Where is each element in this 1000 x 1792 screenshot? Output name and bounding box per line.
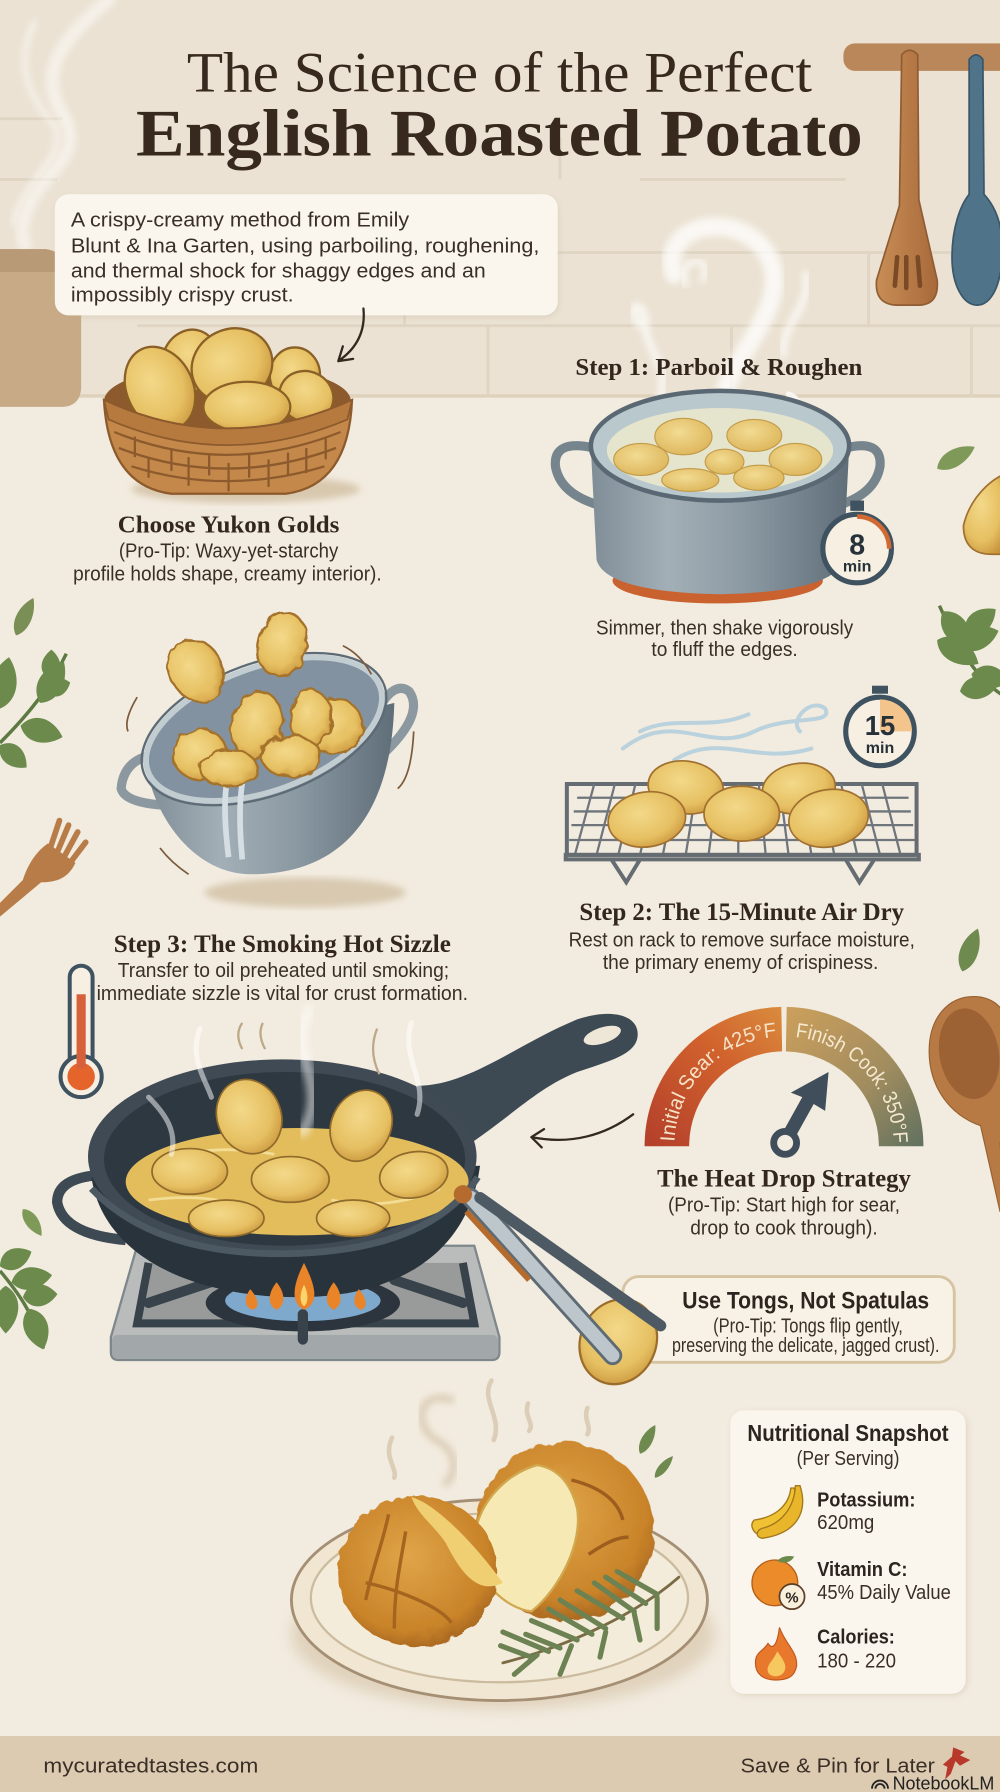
timer: 8 min: min <box>843 558 871 575</box>
pot handles <box>555 446 880 505</box>
steam: above plate <box>389 1381 589 1483</box>
text: step 3: immediate sizzle is vital for crust formation. <box>97 982 468 1005</box>
text: step 3 <box>97 931 468 1005</box>
text: step 1 description: to fluff the edges. <box>651 638 798 661</box>
steam: above boiling pot <box>634 227 806 440</box>
pan body <box>91 1166 480 1297</box>
decoration: bottom left parsley <box>0 1205 58 1353</box>
text: step 2: the primary enemy of crispiness. <box>603 951 878 974</box>
heading: step 1: Step 1: Parboil & Roughen <box>575 355 862 381</box>
timer: 15 min <box>846 686 914 766</box>
text: step 2 <box>569 899 915 974</box>
flying potatoes <box>157 629 236 713</box>
text: choose yukon golds: profile holds shape, creamy interior). <box>73 563 382 586</box>
potatoes <box>605 756 873 853</box>
callout: use tongs: (Pro-Tip: Tongs flip gently, <box>713 1315 903 1338</box>
footer <box>0 1736 1000 1792</box>
icon: flame <box>755 1627 797 1680</box>
icon: thermometer <box>61 966 102 1097</box>
jar <box>0 249 81 407</box>
needle <box>779 1072 829 1145</box>
step 1: boiling pot <box>555 391 880 603</box>
icon: orange: % <box>785 1590 799 1606</box>
wall rack with hanging utensils <box>843 43 1000 305</box>
timer: 15 min: 15 <box>865 710 895 741</box>
motion lines <box>127 646 414 874</box>
arrow: gauge to skillet <box>531 1114 633 1147</box>
decoration: right herbs and potato <box>931 439 1000 974</box>
callout: intro: and thermal shock for shaggy edges and an <box>71 260 486 283</box>
decoration: left parsley and leaf <box>0 595 74 775</box>
herb sprigs <box>635 1422 660 1456</box>
potassium text <box>817 1488 915 1534</box>
arrow: callout to basket <box>338 309 364 361</box>
callout: use tongs: Use Tongs, Not Spatulas <box>682 1288 929 1315</box>
illustration: wire rack with drying potatoes <box>566 705 919 882</box>
icon: red pin <box>943 1747 970 1779</box>
text: step 3: Transfer to oil preheated until smoking; <box>118 959 449 982</box>
panel: nutritional snapshot <box>730 1410 967 1695</box>
steam <box>149 1011 420 1154</box>
rosemary <box>501 1571 679 1674</box>
decoration: wooden spoon <box>929 997 1000 1211</box>
finish cook arc <box>786 1029 901 1146</box>
text: heat drop strategy: drop to cook through). <box>690 1216 878 1239</box>
text: step 2: Rest on rack to remove surface moisture, <box>569 928 915 951</box>
illustration: shaken pot with fluffed potatoes <box>121 607 414 907</box>
potassium text: Potassium: <box>817 1488 915 1511</box>
roasted potato on plate <box>291 1422 714 1709</box>
text: step 1 description: Simmer, then shake vigorously <box>596 616 854 639</box>
callout: intro: Blunt & Ina Garten, using parboiling, roughening, <box>71 235 539 258</box>
plate shadow <box>291 1560 714 1709</box>
burner <box>613 558 823 603</box>
steam: left wall <box>14 0 109 246</box>
stove <box>111 1246 499 1360</box>
vitamin c text: 45% Daily Value <box>817 1581 951 1604</box>
shadow <box>205 878 406 907</box>
text: step 1 description <box>596 616 854 661</box>
boiling potatoes <box>614 418 822 491</box>
calories text <box>817 1625 896 1672</box>
potassium text: 620mg <box>817 1511 874 1534</box>
timer: 15 min: min <box>866 740 894 757</box>
footer: Save & Pin for Later <box>741 1755 935 1778</box>
vitamin c text: Vitamin C: <box>817 1558 907 1581</box>
text: step 2: Step 2: The 15-Minute Air Dry <box>579 899 904 926</box>
flames <box>246 1263 366 1310</box>
right half <box>461 1428 668 1635</box>
text: heat drop strategy: The Heat Drop Strategy <box>657 1165 911 1192</box>
text: heat drop strategy <box>657 1165 911 1239</box>
wind swirl <box>623 705 826 760</box>
panel: nutritional snapshot: Nutritional Snapshot <box>747 1420 949 1446</box>
gauge: heat drop: Finish Cook: 350°F <box>796 1023 908 1142</box>
callout: intro: impossibly crispy crust. <box>71 284 294 307</box>
basket of potatoes <box>104 315 360 503</box>
vitamin c text <box>817 1558 951 1604</box>
spatula <box>876 50 937 305</box>
text: choose yukon golds <box>73 513 382 586</box>
handles <box>377 688 414 754</box>
pot body <box>146 703 394 874</box>
title: The Science of the Perfect <box>187 41 812 104</box>
timer: 8 min: 8 <box>849 529 865 561</box>
callout: intro <box>55 194 558 317</box>
rack <box>567 784 917 855</box>
arc labels: Initial Sear: 425°F <box>660 1022 775 1140</box>
helper handle <box>57 1175 126 1240</box>
panel: nutritional snapshot: (Per Serving) <box>797 1447 899 1470</box>
decoration: wooden fork <box>0 821 86 917</box>
footer: mycuratedtastes.com <box>43 1755 258 1778</box>
potatoes in pot <box>157 607 363 786</box>
text: choose yukon golds: (Pro-Tip: Waxy-yet-starchy <box>119 540 339 563</box>
calories text: Calories: <box>817 1625 895 1648</box>
text: choose yukon golds: Choose Yukon Golds <box>118 513 339 539</box>
tong arms <box>471 1198 613 1355</box>
gauge: heat drop <box>644 1006 924 1158</box>
long handle <box>417 1014 638 1149</box>
timer: 8 min <box>823 501 891 583</box>
spoon <box>952 55 1000 305</box>
icon: banana <box>752 1486 803 1538</box>
callout: intro: A crispy-creamy method from Emily <box>71 208 410 231</box>
skillet with oil and potatoes <box>57 1011 638 1297</box>
rack bar <box>843 43 1000 71</box>
calories text: 180 - 220 <box>817 1649 896 1672</box>
illustration: tongs holding potato <box>454 1185 671 1397</box>
initial sear arc <box>667 1029 782 1146</box>
potatoes <box>152 1070 451 1237</box>
potato <box>566 1286 671 1397</box>
icon: orange <box>752 1556 805 1609</box>
title <box>136 41 863 170</box>
text: step 3: Step 3: The Smoking Hot Sizzle <box>114 931 451 958</box>
text: heat drop strategy: (Pro-Tip: Start high for sear, <box>668 1193 900 1216</box>
plate <box>291 1499 707 1701</box>
left half <box>337 1496 497 1647</box>
pot body <box>591 448 849 594</box>
callout: use tongs <box>623 1277 954 1362</box>
oil <box>126 1128 469 1235</box>
title: English Roasted Potato <box>136 97 863 170</box>
